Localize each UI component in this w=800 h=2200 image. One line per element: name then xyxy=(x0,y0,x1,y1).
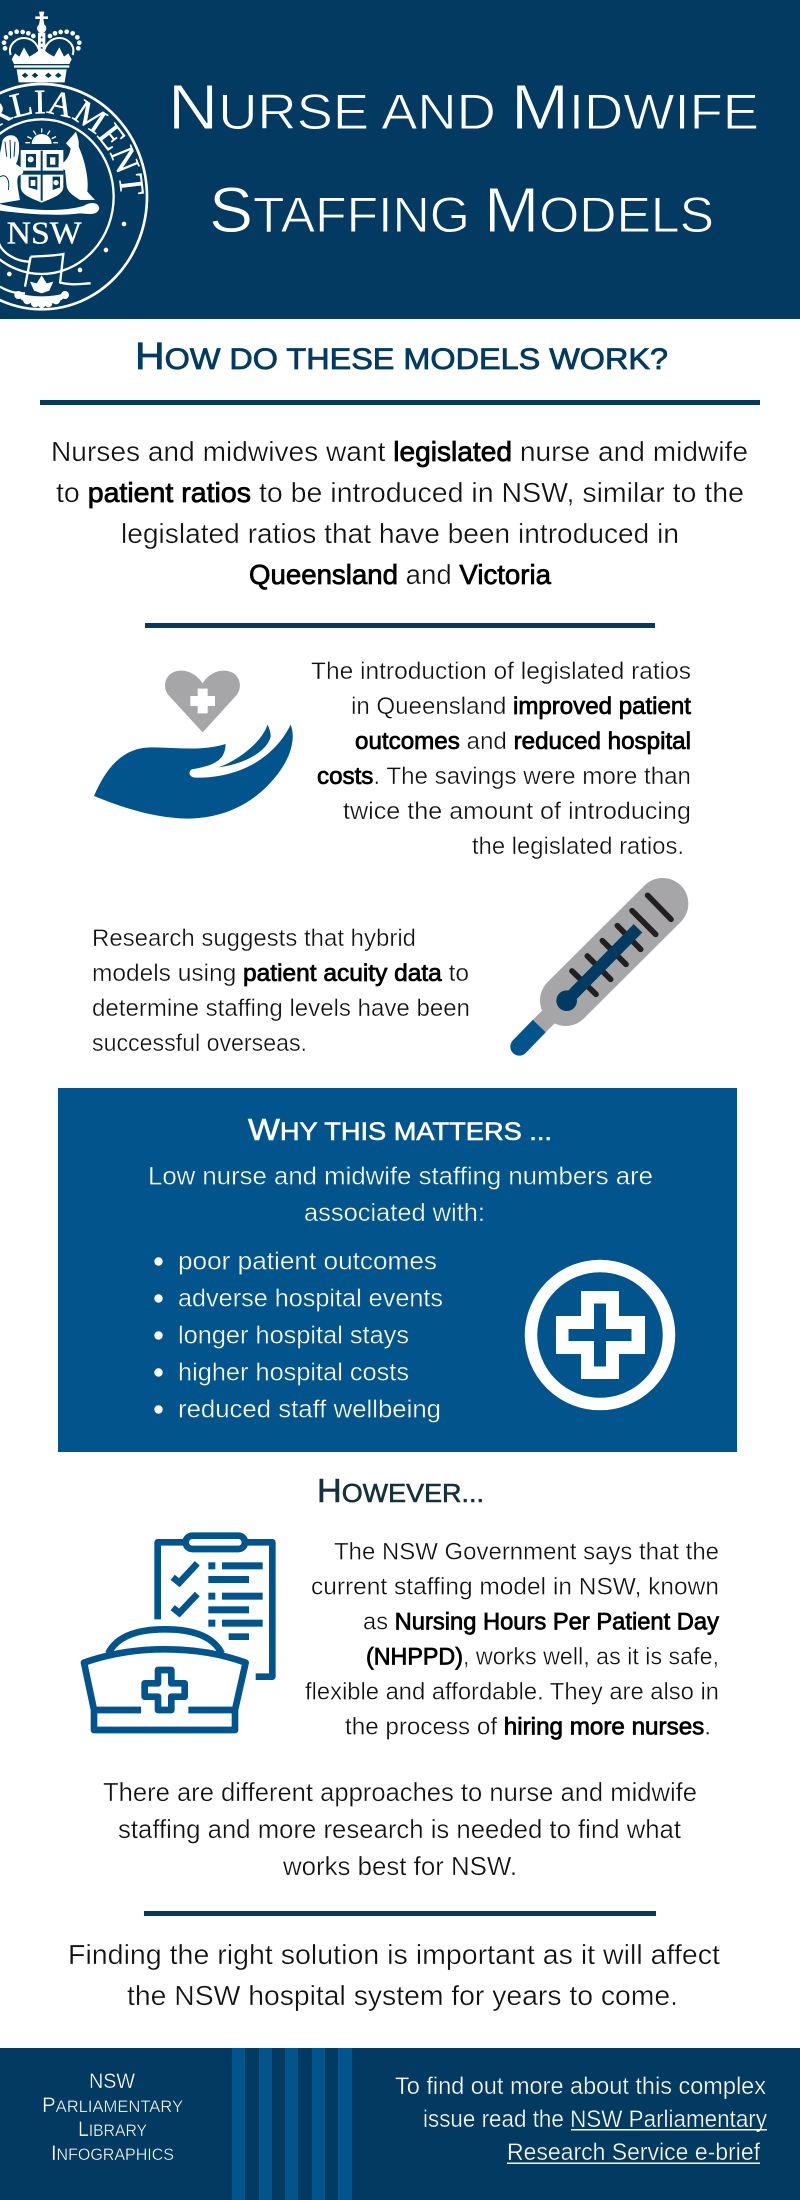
text: low staffing numbers: associated with: xyxy=(304,1199,485,1227)
icon: parliament crest: NSW xyxy=(7,215,82,250)
text block: NSW Government view: as Nursing Hours Per Patient Day xyxy=(363,1608,719,1636)
heading: why this matters: WHY THIS MATTERS ... xyxy=(248,1112,552,1147)
text block: Queensland outcomes: the legislated ratios. xyxy=(472,833,684,860)
kangaroo xyxy=(58,132,95,200)
footer text: library name: PARLIAMENTARY xyxy=(42,2094,183,2117)
icon: parliament crest xyxy=(0,12,148,311)
title: STAFFING MODELS xyxy=(209,174,714,246)
text block: NSW Government view xyxy=(305,1538,719,1740)
text block: conclusion xyxy=(68,1939,720,2011)
text block: NSW Government view: the process of hiring more nurses. xyxy=(345,1714,711,1740)
text block: intro paragraph: Queensland and Victoria xyxy=(249,559,551,590)
text block: different approaches: staffing and more research is needed to find what xyxy=(118,1814,682,1844)
footer xyxy=(0,2048,800,2200)
text block: Queensland outcomes: in Queensland improved patient xyxy=(351,693,691,720)
bullet list: effects of low staffing: longer hospital stays xyxy=(178,1322,409,1350)
bullet list: effects of low staffing: adverse hospital events xyxy=(178,1284,443,1312)
sun xyxy=(32,134,52,144)
text block: hybrid models research: Research suggests that hybrid xyxy=(92,925,416,952)
text block: hybrid models research: determine staffing levels have been xyxy=(92,995,470,1022)
footer text: library name: INFOGRAPHICS xyxy=(51,2142,174,2165)
text block: Queensland outcomes: twice the amount of introducing xyxy=(343,798,691,825)
text block: Queensland outcomes: outcomes and reduced hospital xyxy=(355,728,691,755)
title xyxy=(168,71,759,246)
bullet list: effects of low staffing: reduced staff wellbeing xyxy=(178,1396,441,1424)
text block: NSW Government view: (NHPPD), works well, as it is safe, xyxy=(366,1644,719,1670)
text block: Queensland outcomes xyxy=(311,658,691,860)
footer text: read the e-brief: issue read the NSW Parliamentary xyxy=(423,2106,767,2133)
bullet list: effects of low staffing: poor patient outcomes xyxy=(178,1248,437,1276)
icon: medical cross in circle xyxy=(531,1266,669,1404)
title: NURSE AND MIDWIFE xyxy=(168,71,759,143)
text block: intro paragraph xyxy=(51,436,748,590)
text block: hybrid models research: successful overseas. xyxy=(92,1030,307,1057)
text block: conclusion: Finding the right solution is important as it will affect xyxy=(68,1939,720,1970)
shield xyxy=(21,150,63,203)
text block: NSW Government view: The NSW Government says that the xyxy=(334,1538,719,1566)
lion xyxy=(0,135,23,203)
text block: different approaches: works best for NSW. xyxy=(282,1851,517,1881)
text block: intro paragraph: to patient ratios to be introduced in NSW, similar to the xyxy=(56,477,744,508)
text block: NSW Government view: current staffing model in NSW, known xyxy=(311,1574,719,1600)
footer text: read the e-brief: Research Service e-brief xyxy=(507,2139,760,2166)
buckle and strap xyxy=(0,242,91,293)
icon: hand holding heart xyxy=(94,671,293,819)
text block: NSW Government view: flexible and affordable. They are also in xyxy=(305,1678,719,1706)
icon: thermometer xyxy=(510,895,671,1056)
text block: intro paragraph: Nurses and midwives want legislated nurse and midwife xyxy=(51,436,748,467)
icon: nurse cap and clipboard xyxy=(84,1536,272,1730)
text block: Queensland outcomes: costs. The savings were more than xyxy=(317,763,691,790)
text block: different approaches xyxy=(103,1777,697,1881)
footer text: read the e-brief: To find out more about this complex xyxy=(395,2073,766,2100)
heading: however: HOWEVER... xyxy=(317,1472,484,1509)
footer text: read the e-brief xyxy=(395,2073,767,2166)
text: low staffing numbers: Low nurse and midwife staffing numbers are xyxy=(148,1162,653,1190)
text block: Queensland outcomes: The introduction of legislated ratios xyxy=(311,658,691,685)
text block: intro paragraph: legislated ratios that have been introduced in xyxy=(121,518,679,549)
bullet list: effects of low staffing xyxy=(154,1248,443,1424)
footer text: library name: NSW xyxy=(89,2070,135,2093)
text block: hybrid models research: models using patient acuity data to xyxy=(92,960,469,987)
text: low staffing numbers xyxy=(148,1162,653,1227)
bullet list: effects of low staffing: higher hospital costs xyxy=(178,1358,409,1386)
text block: hybrid models research xyxy=(92,925,470,1057)
panel: why this matters xyxy=(58,1088,737,1452)
text block: conclusion: the NSW hospital system for years to come. xyxy=(127,1980,678,2011)
text block: different approaches: There are different approaches to nurse and midwife xyxy=(103,1777,697,1807)
motto scroll xyxy=(0,203,99,215)
heading: how do these models work: HOW DO THESE MODELS WORK? xyxy=(135,336,668,378)
footer text: library name: LIBRARY xyxy=(78,2118,147,2141)
footer text: library name xyxy=(42,2070,183,2165)
header banner xyxy=(0,0,800,319)
